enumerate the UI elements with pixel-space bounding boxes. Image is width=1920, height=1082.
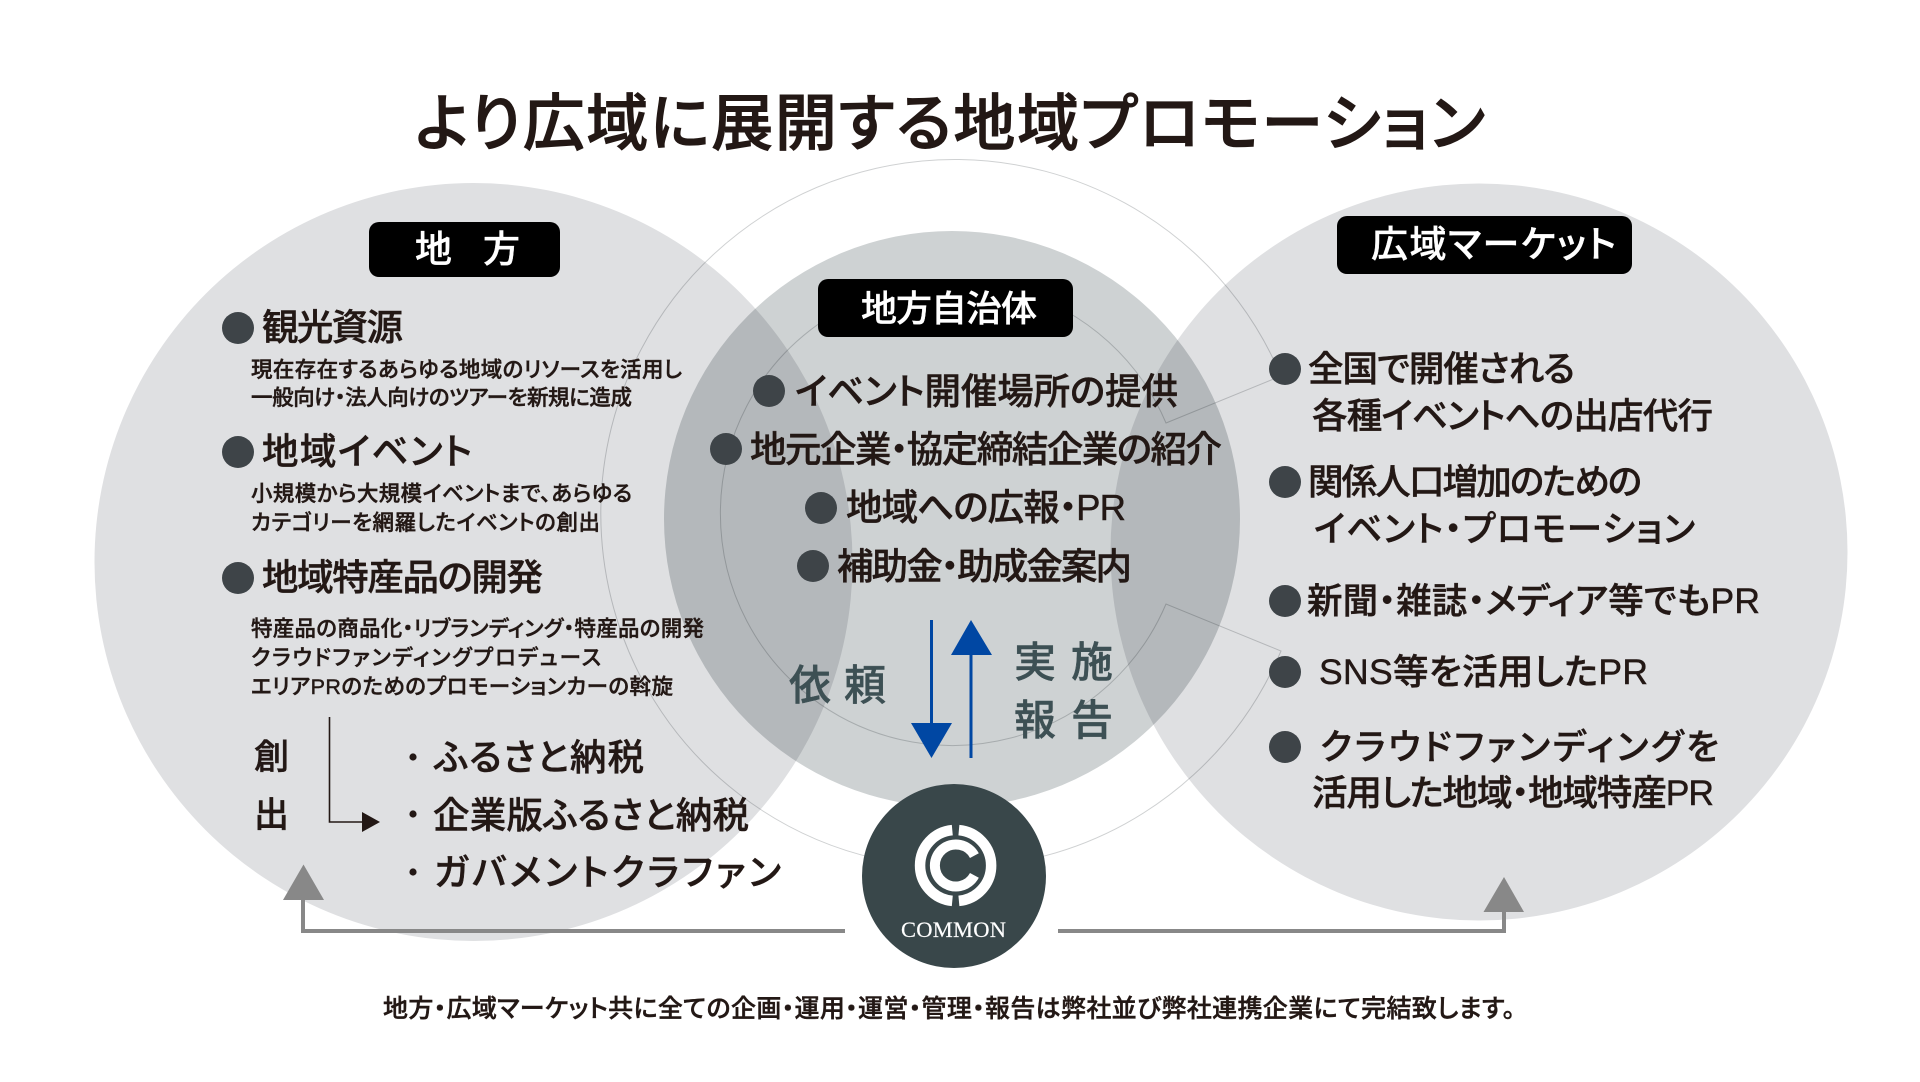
item: 補助金・助成金案内: 補助金・助成金案内 <box>837 546 1132 587</box>
list: 創出 items <box>409 737 781 893</box>
item: 地域イベント: 小規模から大規模イベントまで、あらゆる <box>251 482 632 506</box>
item: 地域イベント: 地域イベント <box>262 431 472 472</box>
item: SNS等を活用したPR: SNS等を活用したPR <box>1319 652 1648 692</box>
item: 地域特産品の開発: 地域特産品の開発 <box>262 557 543 598</box>
arrow: 実施報告 up <box>951 620 992 758</box>
arrow: 依頼 down <box>911 620 952 758</box>
item: 地域特産品の開発 <box>222 557 704 699</box>
label: 創出: 創 <box>254 738 289 777</box>
item: 地域イベント: カテゴリーを網羅したイベントの創出 <box>251 510 600 535</box>
badge: 広域マーケット <box>1337 216 1632 274</box>
item: 全国で開催される: 全国で開催される <box>1308 349 1575 389</box>
footer note: 地方・広域マーケット共に全ての企画・運用・運営・管理・報告は弊社並び弊社連携企業にて完結致します。 <box>383 995 1515 1023</box>
arrow: 創出 <box>330 717 380 832</box>
badge: 広域マーケット: 広域マーケット <box>1371 224 1616 265</box>
item: 全国で開催される: 各種イベントへの出店代行 <box>1312 396 1713 436</box>
label: 実施: 実施 <box>1014 639 1113 686</box>
panel: 地方自治体 list <box>710 371 1222 587</box>
item: 地域特産品の開発: 特産品の商品化・リブランディング・特産品の開発 <box>251 616 704 641</box>
item: 地域特産品の開発: クラウドファンディングプロデュース <box>251 645 601 670</box>
item: 地域への広報・PR: 地域への広報・PR <box>846 487 1126 528</box>
label: 依頼: 依頼 <box>789 662 886 709</box>
list: 創出 items: ガバメントクラファン <box>434 852 781 893</box>
item: クラウドファンディングを: クラウドファンディングを <box>1320 727 1719 767</box>
label: 創出 <box>254 738 289 835</box>
list: 創出 items: 企業版ふるさと納税 <box>433 795 749 836</box>
item: 観光資源: 観光資源 <box>262 307 403 348</box>
item: クラウドファンディングを <box>1269 727 1719 813</box>
badge: 地方自治体: 地方自治体 <box>861 288 1037 329</box>
item: 地域イベント <box>222 431 632 535</box>
item: 観光資源: 一般向け・法人向けのツアーを新規に造成 <box>251 386 632 410</box>
circle: 地方自治体 <box>664 231 1240 807</box>
item: イベント開催場所の提供: イベント開催場所の提供 <box>795 371 1178 412</box>
item: 関係人口増加のための: 関係人口増加のための <box>1308 462 1642 502</box>
panel: 広域マーケット list <box>1269 349 1760 813</box>
item: 関係人口増加のための: イベント・プロモーション <box>1314 509 1695 549</box>
thin connecting outline <box>601 160 1281 867</box>
circle: 広域マーケット <box>1110 184 1848 920</box>
panel: 地方 list <box>222 307 781 893</box>
logo: COMMON: COMMON <box>901 917 1006 942</box>
arrow: to 地方 <box>283 864 845 931</box>
list: 創出 items: ふるさと納税 <box>433 737 644 778</box>
item: 全国で開催される <box>1269 349 1713 436</box>
circle: 地方 <box>94 183 852 941</box>
item: 観光資源: 現在存在するあらゆる地域のリソースを活用し <box>251 358 682 382</box>
label: 創出: 出 <box>254 796 289 835</box>
badge: 地方: 地方 <box>415 229 520 270</box>
label: 報告: 報告 <box>1014 697 1113 744</box>
item: 観光資源 <box>222 307 682 410</box>
logo: COMMON <box>862 784 1046 968</box>
title: より広域に展開する地域プロモーション <box>415 90 1485 159</box>
badge: 地方自治体 <box>818 279 1073 337</box>
item: 地元企業・協定締結企業の紹介: 地元企業・協定締結企業の紹介 <box>750 429 1222 470</box>
badge: 地方 <box>369 222 560 277</box>
item: 地域特産品の開発: エリアPRのためのプロモーションカーの斡旋 <box>251 675 673 699</box>
arrow: to 広域マーケット <box>1058 877 1524 931</box>
item: 関係人口増加のための <box>1269 462 1695 549</box>
item: クラウドファンディングを: 活用した地域・地域特産PR <box>1312 773 1714 813</box>
venn circles <box>94 160 1848 941</box>
item: 新聞・雑誌・メディア等でもPR: 新聞・雑誌・メディア等でもPR <box>1307 581 1760 621</box>
